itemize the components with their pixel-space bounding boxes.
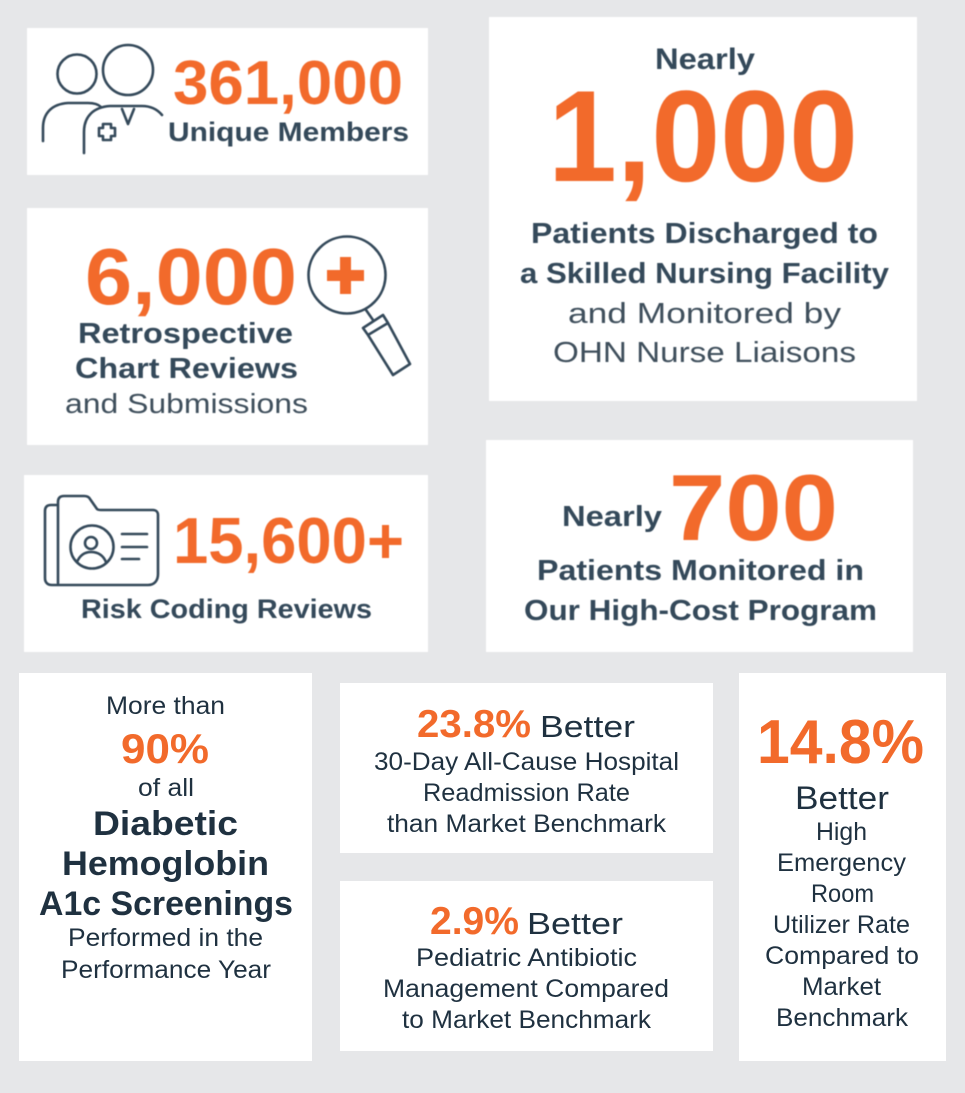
stat: 23.8%: 23.8% xyxy=(417,703,531,746)
heading: diabetic hemoglobin a1c screenings: Diabetic xyxy=(93,805,238,843)
icon: two people with medical cross xyxy=(43,45,162,153)
heading: diabetic hemoglobin a1c screenings: A1c Screenings xyxy=(39,885,293,923)
text: high-cost description: Patients Monitored in xyxy=(537,555,864,587)
text: readmission description: than Market Benchmark xyxy=(387,810,667,838)
heading: diabetic hemoglobin a1c screenings xyxy=(39,805,293,923)
label: nearly: Nearly xyxy=(562,501,662,533)
panel: pediatric antibiotic xyxy=(340,881,713,1051)
text: better: Better xyxy=(527,906,623,941)
stat: 14.8%: 14.8% xyxy=(757,708,924,777)
label: risk coding reviews: Risk Coding Reviews xyxy=(81,594,372,624)
icon: patient folder xyxy=(45,496,158,585)
text: antibiotic description: to Market Benchmark xyxy=(402,1006,652,1034)
text: emergency room description: Compared to xyxy=(765,942,919,970)
text: skilled nursing description: a Skilled Nursing Facility xyxy=(520,258,889,290)
stat: 90%: 90% xyxy=(121,725,209,772)
text: retrospective chart reviews and submissions: Chart Reviews xyxy=(75,353,298,385)
panel: risk coding reviews xyxy=(24,475,428,652)
text: readmission description: Readmission Rate xyxy=(423,779,630,807)
text: skilled nursing description: OHN Nurse Liaisons xyxy=(553,337,856,369)
text: antibiotic description: Pediatric Antibiotic xyxy=(416,944,637,972)
stat: 361,000: 361,000 xyxy=(173,49,403,118)
text: performed in the performance year: Performance Year xyxy=(61,956,271,984)
text: antibiotic description xyxy=(383,944,669,1034)
text: high-cost description xyxy=(524,555,877,627)
panel: emergency room utilizer xyxy=(739,673,946,1061)
text: emergency room description: Benchmark xyxy=(776,1004,909,1032)
text: emergency room description: Emergency xyxy=(777,849,906,877)
stat: 1,000: 1,000 xyxy=(548,63,858,209)
text: of all: of all xyxy=(138,774,194,802)
stat: 15,600+: 15,600+ xyxy=(173,504,404,577)
text: retrospective chart reviews and submissions xyxy=(65,318,308,419)
text: skilled nursing description xyxy=(520,218,889,369)
text: better: Better xyxy=(795,780,889,816)
panel: chart reviews xyxy=(27,208,428,445)
text: high-cost description: Our High-Cost Program xyxy=(524,595,877,627)
panel: unique members xyxy=(27,28,428,175)
text: emergency room description: Utilizer Rate xyxy=(773,911,910,939)
text: emergency room description xyxy=(765,818,919,1032)
panel: diabetic screenings xyxy=(19,673,312,1061)
heading: diabetic hemoglobin a1c screenings: Hemoglobin xyxy=(62,845,269,883)
stat: 6,000: 6,000 xyxy=(85,232,297,321)
panel: hospital readmission xyxy=(340,683,713,853)
text: readmission description: 30-Day All-Cause Hospital xyxy=(374,748,679,776)
icon: magnifying glass with plus xyxy=(308,236,410,375)
text: skilled nursing description: and Monitored by xyxy=(568,298,842,330)
stat: 2.9%: 2.9% xyxy=(430,900,519,943)
text: more than: More than xyxy=(106,692,225,720)
label: nearly: Nearly xyxy=(655,43,755,76)
text: performed in the performance year: Performed in the xyxy=(68,924,263,952)
text: antibiotic description: Management Compared xyxy=(383,975,669,1003)
text: readmission description xyxy=(374,748,679,838)
text: emergency room description: Room xyxy=(811,880,874,908)
label: unique members: Unique Members xyxy=(168,117,409,147)
text: performed in the performance year xyxy=(61,924,271,984)
text: retrospective chart reviews and submissions: and Submissions xyxy=(65,388,308,419)
stat: 700: 700 xyxy=(669,455,838,560)
text: better: Better xyxy=(540,709,635,744)
text: retrospective chart reviews and submissions: Retrospective xyxy=(78,318,293,350)
panel: high-cost program xyxy=(486,440,913,652)
panel: skilled nursing discharges xyxy=(489,17,917,401)
text: emergency room description: Market xyxy=(802,973,881,1001)
text: emergency room description: High xyxy=(816,818,867,846)
text: skilled nursing description: Patients Discharged to xyxy=(531,218,878,250)
